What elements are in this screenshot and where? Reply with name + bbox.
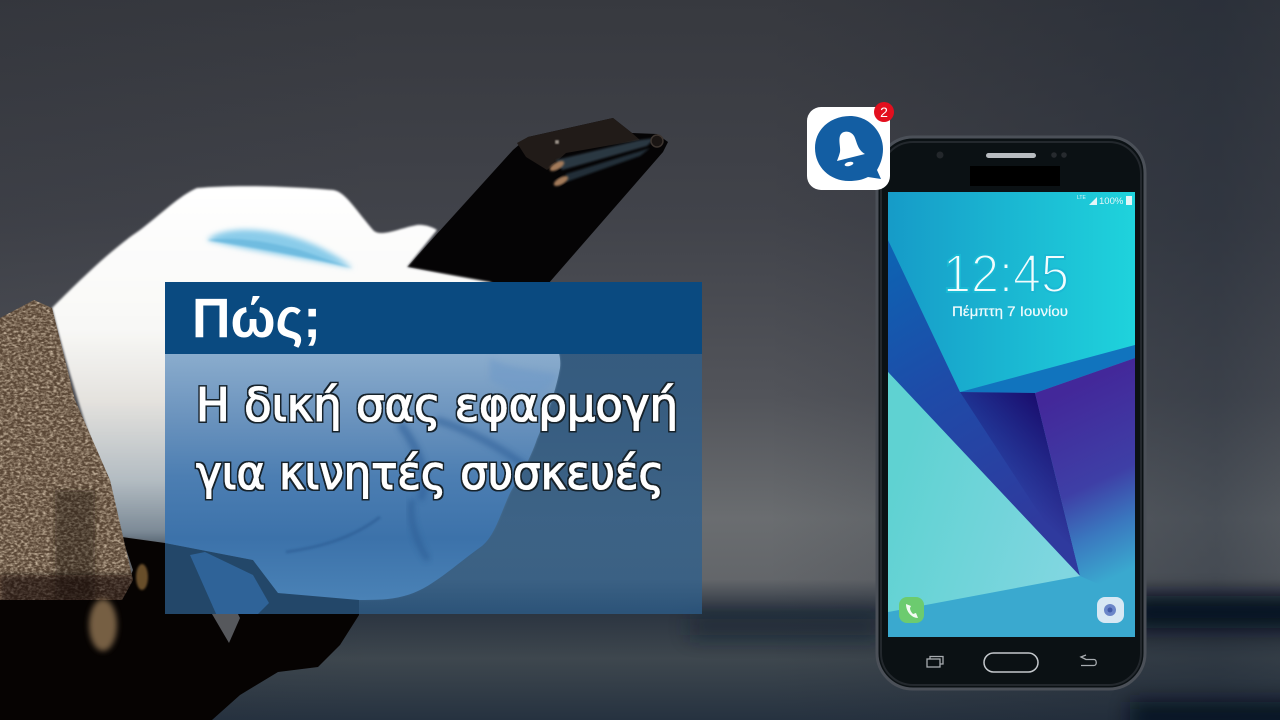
icon: back key (1081, 655, 1096, 666)
earpiece (986, 153, 1036, 158)
icon: camera app (1097, 597, 1124, 623)
panel header (165, 282, 702, 354)
dark sleeve shadow (0, 537, 359, 720)
photo: hand holding smartphone (0, 118, 668, 720)
held phone (407, 118, 668, 284)
heading: Πώς; (192, 286, 321, 349)
camera and sensors (936, 152, 1067, 158)
bell (837, 132, 865, 167)
text block: για κινητές συσκευές (196, 446, 664, 500)
home button (984, 653, 1038, 672)
lock screen wallpaper (888, 192, 1135, 637)
icon: phone app (899, 597, 924, 623)
smartphone mockup (877, 137, 1145, 689)
icon: notification app (807, 102, 894, 190)
status bar: LTE (1077, 195, 1086, 201)
wrist sliver below panel (212, 614, 240, 643)
panel body (165, 354, 702, 614)
status bar (1077, 195, 1132, 207)
icon: recents key (927, 656, 943, 667)
wrist sliver (190, 552, 269, 614)
panel: how (165, 282, 702, 643)
sleeve (0, 295, 148, 651)
status bar: 100% (1099, 196, 1124, 207)
clock: 12:45 (943, 244, 1069, 304)
text block: Η δική σας εφαρμογή (196, 378, 678, 432)
notification badge: 2 (880, 104, 888, 120)
date: Πέμπτη 7 Ιουνίου (952, 303, 1068, 319)
hand seen through panel (165, 354, 560, 614)
redacted black bar (970, 166, 1060, 186)
text block (196, 378, 678, 500)
app tile (807, 107, 890, 190)
speech bubble (815, 116, 883, 181)
hand, upper part (52, 186, 560, 600)
phone body (877, 137, 1145, 689)
